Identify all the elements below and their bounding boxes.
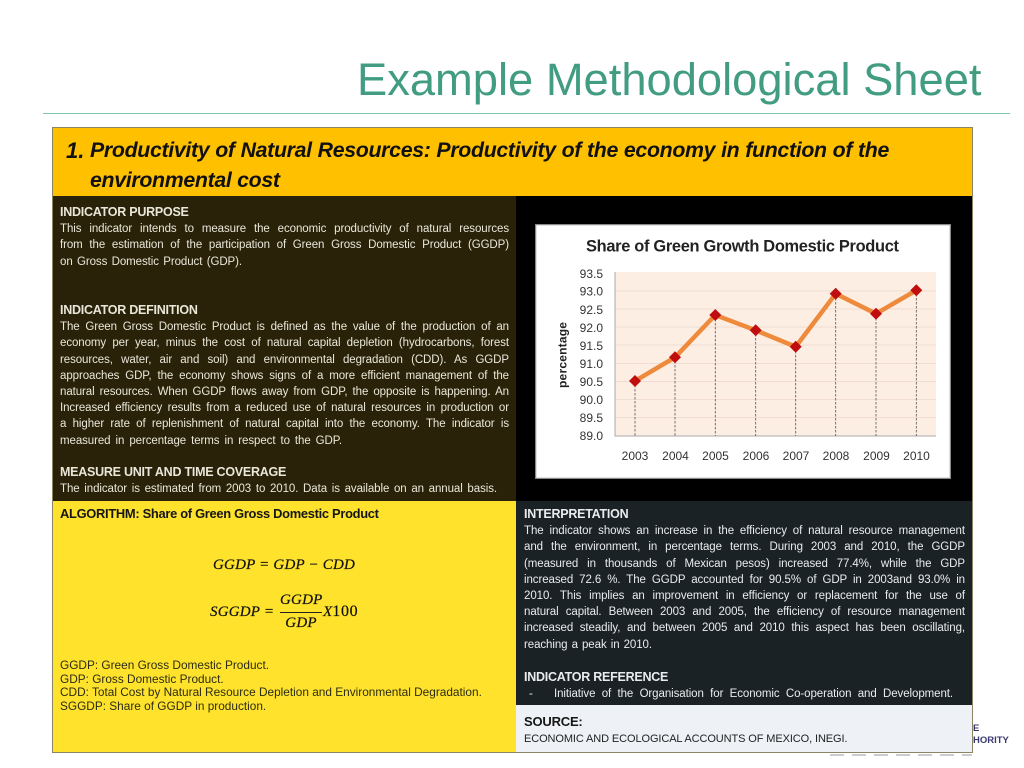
text: indicator definition: The Green Gross Domestic Product is defined as the value of the production of an bbox=[60, 321, 509, 333]
sheet heading: Productivity of Natural Resources: Productivity of the economy in function of the bbox=[90, 138, 889, 162]
y axis labels bbox=[580, 267, 603, 443]
y axis labels: 93.0 bbox=[580, 284, 603, 298]
panel: left description bbox=[53, 196, 516, 501]
y axis title: percentage bbox=[556, 322, 570, 388]
x axis labels: 2007 bbox=[783, 449, 810, 463]
panel: methodological sheet bbox=[53, 128, 972, 752]
text: indicator purpose: INDICATOR PURPOSE bbox=[60, 205, 189, 219]
panel: algorithm bbox=[53, 501, 516, 752]
formula: SGGDP: GDP bbox=[285, 615, 317, 631]
text: indicator definition: measured in percentage terms in respect to the GDP. bbox=[60, 435, 342, 447]
formula: GGDP: GGDP = GDP − CDD bbox=[213, 557, 355, 573]
sheet heading: environmental cost bbox=[90, 168, 280, 192]
text: indicator reference: - bbox=[529, 688, 533, 700]
text: indicator definition: natural resources. When GGDP flows away from GDP, the opposite is happening. An bbox=[60, 386, 509, 398]
panel: header band bbox=[53, 128, 972, 196]
text: measure unit and time coverage bbox=[60, 465, 497, 495]
text: indicator reference: INDICATOR REFERENCE bbox=[524, 670, 668, 684]
text: indicator reference bbox=[524, 670, 953, 700]
x axis labels: 2005 bbox=[702, 449, 729, 463]
text: interpretation: and the environment, in percentage terms. During 2003 and 2010, the GGDP bbox=[524, 541, 965, 553]
text: indicator definition: economy per year, minus the cost of natural capital depletion (hydrocarbons, forest bbox=[60, 337, 509, 349]
y axis labels: 92.5 bbox=[580, 303, 603, 317]
formula: SGGDP bbox=[210, 592, 358, 631]
x axis labels: 2010 bbox=[903, 449, 930, 463]
x axis labels: 2003 bbox=[622, 449, 649, 463]
chart title: Share of Green Growth Domestic Product bbox=[586, 238, 900, 256]
text: interpretation: (measured in thousands of Mexican pesos) increased 77.4%, while the GDP bbox=[524, 558, 965, 570]
text: measure unit and time coverage: MEASURE UNIT AND TIME COVERAGE bbox=[60, 465, 286, 479]
text: interpretation bbox=[524, 507, 966, 651]
text: indicator definition: INDICATOR DEFINITION bbox=[60, 303, 198, 317]
logo fragment strip bbox=[830, 754, 972, 756]
logo fragment: HORITY bbox=[973, 735, 1009, 746]
source label: SOURCE: bbox=[524, 714, 583, 729]
formula legend: GDP: Gross Domestic Product. bbox=[60, 672, 224, 686]
y axis labels: 92.0 bbox=[580, 321, 603, 335]
text: indicator purpose: This indicator intends to measure the economic productivity of natural resources bbox=[60, 223, 509, 235]
text: indicator purpose bbox=[60, 205, 509, 268]
source text: ECONOMIC AND ECOLOGICAL ACCOUNTS OF MEXICO, INEGI. bbox=[524, 733, 847, 745]
formula legend: GGDP: Green Gross Domestic Product. bbox=[60, 658, 269, 672]
y axis labels: 90.0 bbox=[580, 393, 603, 407]
text: interpretation: increased 72.6 %. The GGDP accounted for 90.5% of GDP in 2003and 93.0% in bbox=[524, 574, 965, 586]
x axis labels: 2009 bbox=[863, 449, 890, 463]
algorithm heading: ALGORITHM: Share of Green Gross Domestic Product bbox=[60, 506, 379, 521]
logo fragment: E bbox=[973, 723, 979, 734]
x axis labels: 2006 bbox=[743, 449, 770, 463]
y axis labels: 90.5 bbox=[580, 375, 603, 389]
plot area bbox=[615, 272, 936, 436]
sheet number: 1. bbox=[66, 138, 84, 163]
text: indicator definition: approaches GDP, the economy shows signs of a more efficient management of the bbox=[60, 370, 509, 382]
y axis labels: 89.0 bbox=[580, 429, 603, 443]
panel: source bbox=[516, 705, 972, 752]
x axis labels bbox=[622, 449, 930, 463]
formula: SGGDP: GGDP bbox=[280, 592, 322, 608]
data line bbox=[635, 290, 916, 381]
line chart card bbox=[535, 224, 951, 479]
text: interpretation: INTERPRETATION bbox=[524, 507, 628, 521]
title: Example Methodological Sheet bbox=[357, 54, 981, 105]
sheet heading bbox=[90, 138, 889, 192]
text: indicator definition: Increased efficiency results from a reduced use of natural resources in production or bbox=[60, 402, 509, 414]
text: indicator reference: Initiative of the Organisation for Economic Co-operation and Development. bbox=[554, 688, 953, 700]
y axis labels: 91.0 bbox=[580, 357, 603, 371]
formula: SGGDP: X100 bbox=[323, 603, 358, 620]
text: measure unit and time coverage: The indicator is estimated from 2003 to 2010. Data is available on an annual basis. bbox=[60, 483, 497, 495]
text: interpretation: reaching a peak in 2010. bbox=[524, 639, 652, 651]
text: indicator definition: resources, water, air and soil) and environmental degradation (CDD). As GGDP bbox=[60, 354, 509, 366]
formula legend: SGGDP: Share of GGDP in production. bbox=[60, 699, 266, 713]
text: interpretation: increased steadily, and between 2005 and 2010 this aspect has been oscillating, bbox=[524, 622, 965, 634]
logo fragment bbox=[973, 723, 1009, 746]
text: interpretation: The indicator shows an increase in the efficiency of natural resource management bbox=[524, 525, 965, 537]
text: interpretation: 2010. This implies an improvement in efficiency or replacement for the use of bbox=[524, 590, 965, 602]
text: indicator definition bbox=[60, 303, 509, 447]
formula legend: CDD: Total Cost by Natural Resource Depletion and Environmental Degradation. bbox=[60, 685, 482, 699]
x axis labels: 2008 bbox=[823, 449, 850, 463]
text: indicator purpose: from the estimation of the participation of Green Gross Domestic Product (GGDP) bbox=[60, 239, 509, 251]
text: indicator definition: a higher rate of replenishment of natural capital into the economy. The indicator is bbox=[60, 418, 509, 430]
y axis labels: 91.5 bbox=[580, 339, 603, 353]
text: indicator purpose: on Gross Domestic Product (GDP). bbox=[60, 256, 242, 268]
drop lines bbox=[635, 290, 916, 436]
panel: interpretation background bbox=[516, 501, 972, 705]
formula legend bbox=[60, 658, 482, 713]
y axis labels: 93.5 bbox=[580, 267, 603, 281]
x axis labels: 2004 bbox=[662, 449, 689, 463]
formula: SGGDP: SGGDP = bbox=[210, 604, 274, 620]
data markers bbox=[629, 284, 922, 387]
text: interpretation: natural capital. Between 2003 and 2005, the efficiency of resource management bbox=[524, 606, 965, 618]
y axis labels: 89.5 bbox=[580, 411, 603, 425]
